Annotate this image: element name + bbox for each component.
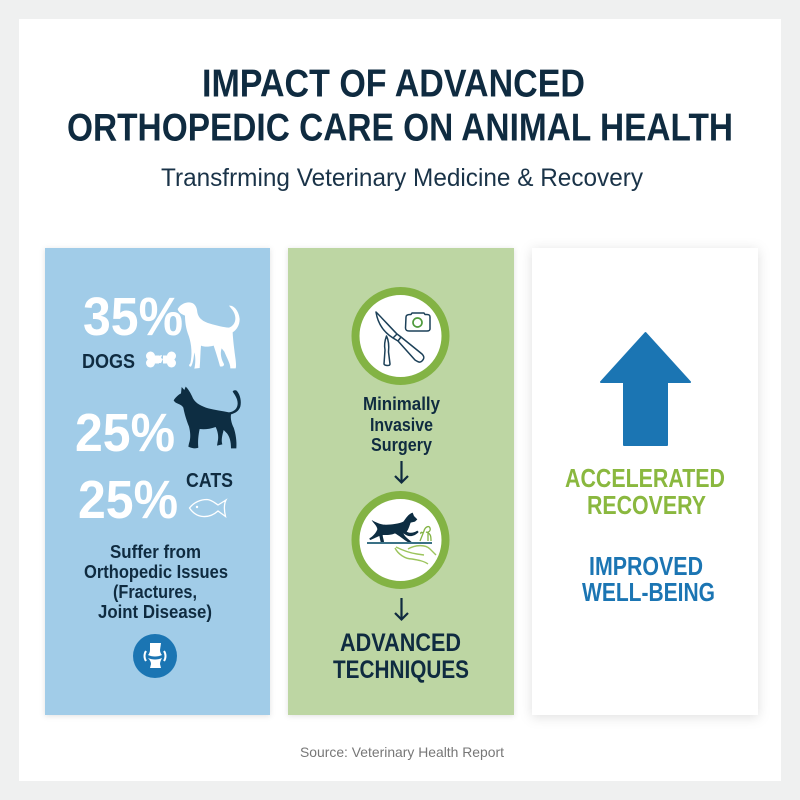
label: improved well-being — [582, 551, 715, 607]
subtitle: Transfrming Veterinary Medicine & Recovery — [161, 164, 643, 192]
stat: 35%: 35% — [83, 287, 183, 347]
icon: bone — [146, 352, 176, 368]
description: (Fractures, — [113, 582, 197, 602]
source: Source: Veterinary Health Report — [300, 744, 504, 760]
description: Suffer from — [110, 542, 201, 562]
icon: white dog — [178, 302, 240, 369]
icon: dog and hand — [356, 495, 446, 585]
running dog — [369, 513, 419, 542]
panel: outcomes — [532, 248, 758, 715]
label: advanced techniques — [333, 629, 469, 684]
arrow: up — [601, 333, 690, 445]
label: accelerated recovery: ACCELERATED — [565, 463, 725, 493]
arrow: down 2 — [395, 598, 408, 620]
ground line — [367, 542, 432, 544]
description — [84, 542, 228, 622]
label: minimally invasive surgery: Invasive — [370, 415, 433, 435]
description: Joint Disease) — [98, 602, 212, 622]
title — [67, 62, 733, 150]
label: improved well-being: IMPROVED — [589, 551, 703, 581]
icon: joint — [133, 634, 177, 678]
paw plants — [420, 527, 431, 541]
label: minimally invasive surgery: Minimally — [363, 394, 440, 414]
label: accelerated recovery — [565, 463, 725, 520]
label: accelerated recovery: RECOVERY — [587, 490, 706, 520]
arrow: down 1 — [395, 461, 408, 482]
label: advanced techniques: ADVANCED — [340, 629, 461, 657]
stat: 25% cats: 25% — [78, 470, 178, 530]
label: dogs: DOGS — [82, 351, 135, 373]
camera — [406, 313, 430, 331]
label: improved well-being: WELL-BEING — [582, 577, 715, 607]
panel: prevalence — [45, 248, 270, 715]
label: advanced techniques: TECHNIQUES — [333, 656, 469, 684]
icon: fish — [190, 500, 226, 517]
small scalpel — [384, 336, 390, 366]
scalpel — [376, 312, 424, 362]
icon: dark dog — [174, 387, 241, 448]
label: minimally invasive surgery — [363, 394, 440, 455]
caring hand — [395, 546, 436, 564]
panel: techniques — [288, 248, 514, 715]
icon: surgery tools — [356, 291, 446, 381]
title: IMPACT OF ADVANCED — [202, 62, 585, 106]
label: cats: CATS — [186, 470, 233, 492]
stat: 25%: 25% — [75, 403, 175, 463]
label: minimally invasive surgery: Surgery — [371, 435, 432, 455]
description: Orthopedic Issues — [84, 562, 228, 582]
